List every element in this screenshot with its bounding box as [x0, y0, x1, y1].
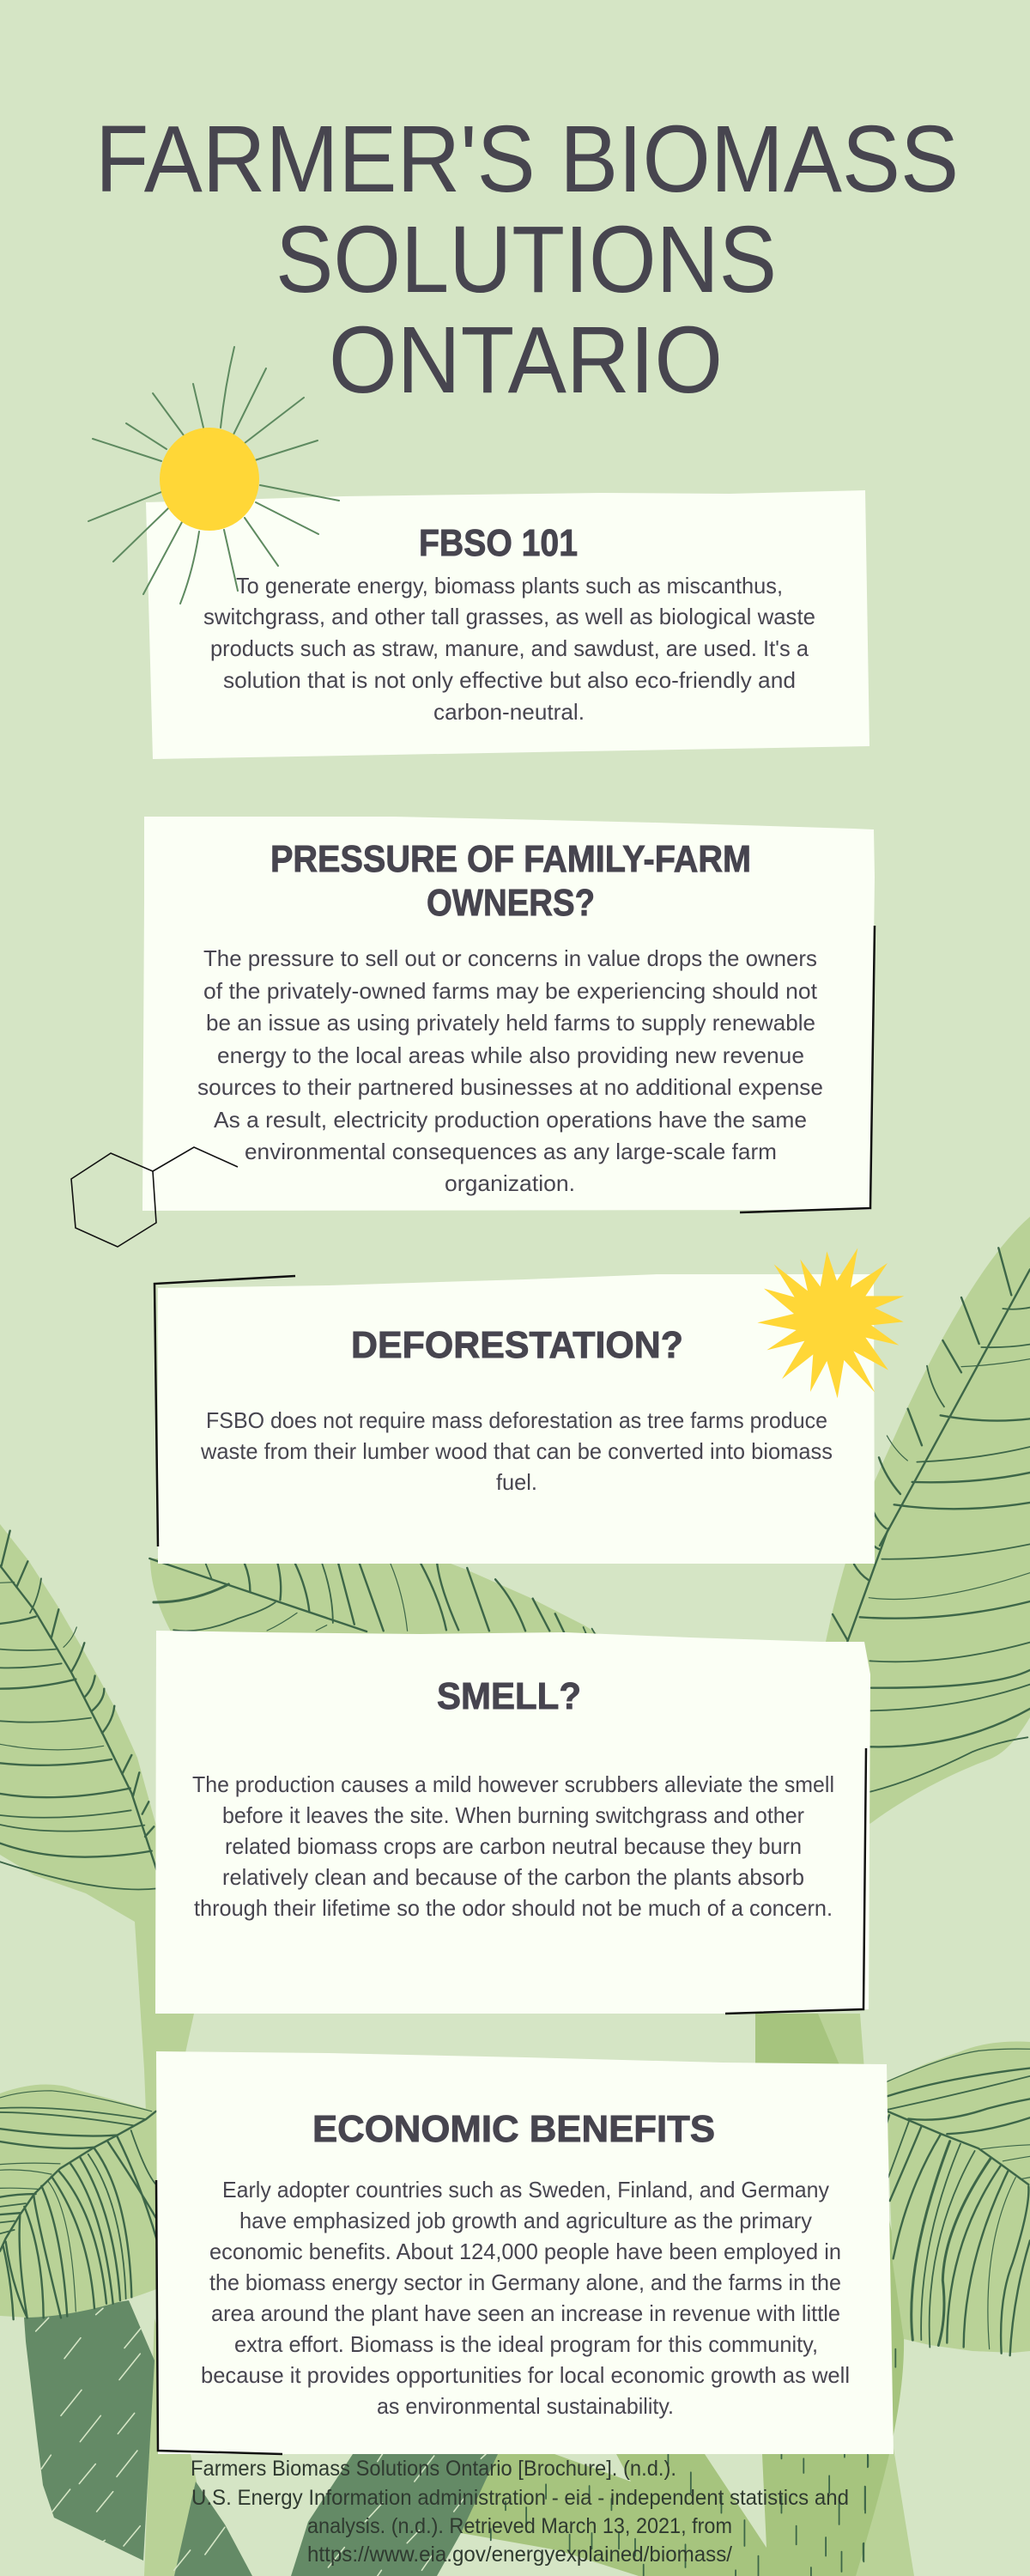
- body text: extra effort. Biomass is the ideal program for this community,: [234, 2331, 818, 2357]
- corner line: [740, 926, 875, 1212]
- leaf: medium green with dashes: [429, 2014, 904, 2576]
- body text: sources to their partnered businesses at no additional expense: [197, 1074, 823, 1100]
- leaf: dark green bottom pieces: [174, 2454, 498, 2576]
- body text: energy to the local areas while also providing new revenue: [217, 1042, 804, 1068]
- card shape: [155, 1631, 870, 2014]
- panel: smell: [155, 1631, 870, 2014]
- panel: FBSO 101: [146, 490, 869, 759]
- body text: [201, 2177, 850, 2419]
- stem: lower right light: [755, 2014, 914, 2576]
- body text: before it leaves the site. When burning switchgrass and other: [222, 1802, 804, 1828]
- leaf: upper right: [824, 1217, 1030, 1846]
- body text: FSBO does not require mass deforestation as tree farms produce: [206, 1407, 827, 1433]
- title: ONTARIO: [329, 307, 723, 413]
- body text: economic benefits. About 124,000 people have been employed in: [209, 2239, 841, 2264]
- corner line: [154, 1276, 295, 1546]
- corner line: [725, 1748, 866, 2014]
- body text: [200, 1407, 833, 1495]
- stem: lower left light: [144, 2318, 197, 2576]
- leaf: left with stem: [0, 1524, 194, 2233]
- body text: The pressure to sell out or concerns in value drops the owners: [203, 945, 817, 971]
- heading: PRESSURE OF FAMILY-FARM: [270, 838, 751, 880]
- body text: of the privately-owned farms may be experiencing should not: [203, 978, 818, 1004]
- body text: waste from their lumber wood that can be converted into biomass: [200, 1438, 833, 1464]
- body text: organization.: [445, 1170, 575, 1196]
- icon: molecule: [71, 1147, 238, 1247]
- body text: products such as straw, manure, and sawdust, are used. It's a: [210, 635, 809, 661]
- body text: fuel.: [496, 1469, 537, 1495]
- body text: as environmental sustainability.: [377, 2393, 674, 2419]
- card shape: [146, 490, 869, 759]
- body text: the biomass energy sector in Germany alone, and the farms in the: [209, 2269, 841, 2295]
- heading: SMELL?: [437, 1675, 581, 1717]
- body text: carbon-neutral.: [433, 699, 585, 725]
- heading: ECONOMIC BENEFITS: [312, 2108, 715, 2150]
- body text: because it provides opportunities for local economic growth as well: [201, 2362, 850, 2388]
- citations: U.S. Energy Information administration - eia - independent statistics and: [191, 2486, 849, 2510]
- body text: As a result, electricity production operations have the same: [214, 1107, 807, 1133]
- body text: [197, 945, 823, 1196]
- body text: To generate energy, biomass plants such as miscanthus,: [236, 573, 783, 598]
- heading: FBSO 101: [419, 522, 578, 564]
- body text: relatively clean and because of the carbon the plants absorb: [222, 1864, 804, 1890]
- corner line: [156, 2180, 282, 2454]
- body text: [203, 573, 815, 725]
- citations: [191, 2457, 849, 2567]
- body text: have emphasized job growth and agriculture as the primary: [239, 2208, 812, 2233]
- body text: area around the plant have seen an increase in revenue with little: [211, 2300, 840, 2326]
- card shape: [158, 1274, 875, 1564]
- leaf: middle left: [149, 1558, 601, 1636]
- rays: [88, 347, 339, 604]
- icon: sun with rays: [88, 347, 339, 604]
- sun disc: [160, 428, 259, 531]
- leaf: bottom right large: [886, 2042, 1030, 2355]
- body text: through their lifetime so the odor should not be much of a concern.: [194, 1895, 833, 1921]
- body text: Early adopter countries such as Sweden, Finland, and Germany: [222, 2177, 829, 2202]
- leaf: bottom left large: [0, 2085, 157, 2319]
- citations: analysis. (n.d.). Retrieved March 13, 2021, from: [307, 2514, 732, 2538]
- body text: solution that is not only effective but also eco-friendly and: [223, 667, 796, 693]
- card shape: [142, 817, 875, 1211]
- panel: economic benefits: [156, 2051, 894, 2454]
- citations: Farmers Biomass Solutions Ontario [Brochure]. (n.d.).: [191, 2457, 676, 2481]
- heading: OWNERS?: [427, 882, 595, 924]
- body text: related biomass crops are carbon neutral because they burn: [225, 1833, 802, 1859]
- title: [95, 106, 959, 413]
- body text: switchgrass, and other tall grasses, as well as biological waste: [203, 604, 815, 629]
- heading: DEFORESTATION?: [351, 1324, 683, 1366]
- citations: https://www.eia.gov/energyexplained/biomass/: [307, 2543, 732, 2567]
- panel: pressure of family-farm owners: [142, 817, 875, 1212]
- title: FARMER'S BIOMASS: [95, 106, 959, 212]
- body text: environmental consequences as any large-scale farm: [245, 1139, 777, 1164]
- body text: The production causes a mild however scrubbers alleviate the smell: [192, 1771, 834, 1797]
- card shape: [156, 2051, 894, 2454]
- body text: be an issue as using privately held farms to supply renewable: [206, 1010, 815, 1036]
- icon: star burst: [757, 1248, 904, 1398]
- panel: deforestation: [154, 1274, 875, 1564]
- leaf: dark green left: [24, 2300, 154, 2561]
- heading: [270, 838, 751, 924]
- body text: [192, 1771, 834, 1921]
- title: SOLUTIONS: [276, 207, 777, 313]
